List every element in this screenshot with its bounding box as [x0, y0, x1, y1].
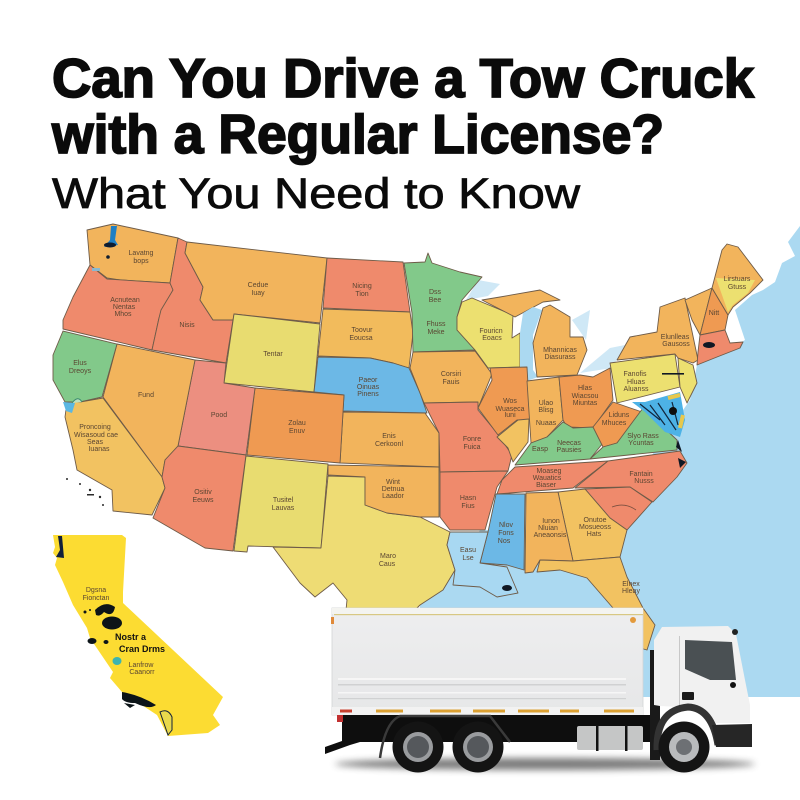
lake: Lake Michigan	[520, 307, 542, 381]
state: Louisiana: Easu	[460, 547, 476, 554]
wheel arch	[657, 707, 718, 750]
state: Oregon: Acnutean	[110, 297, 140, 304]
cab window	[685, 640, 736, 680]
state: Kentucky	[515, 422, 603, 465]
state: Pennsylvania: Fanofis	[624, 371, 647, 378]
state: Minnesota	[404, 253, 482, 352]
inset upper label	[83, 587, 110, 602]
state: Arizona	[153, 446, 246, 551]
California shape	[53, 535, 223, 736]
state: Wisconsin	[457, 298, 520, 368]
state: South Carolina	[585, 487, 652, 530]
state: Mississippi	[480, 494, 525, 570]
state: Tennessee: Wauatics	[533, 475, 562, 482]
state: Georgia: Onutoe	[584, 517, 607, 524]
state: Colorado: Zolau	[288, 420, 306, 427]
state: Missouri: Fuica	[463, 444, 481, 451]
state: Kansas: Enis	[382, 433, 396, 440]
state: Florida: Hleay	[622, 588, 640, 595]
state: Utah: Pood	[211, 412, 227, 419]
state: Montana	[185, 242, 327, 323]
state: North Carolina: Fantain	[629, 471, 653, 478]
state: West Virginia: Mhuces	[602, 420, 627, 427]
state: Colorado	[247, 388, 344, 463]
title	[51, 47, 754, 218]
state: Minnesota: Meke	[427, 329, 445, 336]
state: Wisconsin: Eoacs	[482, 335, 502, 342]
cab	[650, 626, 752, 760]
state: Oregon: Mhos	[114, 311, 132, 318]
state: Washington	[87, 224, 178, 283]
state: Upper Michigan	[482, 290, 560, 317]
state: South Dakota	[318, 309, 413, 368]
state: Arkansas: Hasn	[460, 495, 476, 502]
state: Georgia: Hats	[587, 531, 602, 538]
state: Indiana: Ulao	[539, 400, 553, 407]
state: Virginia	[590, 408, 677, 459]
Channel island specks	[66, 478, 104, 506]
state: Wyoming: Tentar	[263, 351, 283, 358]
mudguards	[380, 716, 510, 758]
state: California	[65, 398, 165, 515]
state: West Virginia	[593, 402, 642, 447]
state: North Dakota: Nicing	[352, 283, 372, 290]
state: Idaho	[152, 238, 233, 363]
fuel tank	[577, 725, 643, 751]
state: Illinois: Wuaseca	[495, 406, 525, 413]
front wheel	[658, 722, 710, 772]
state: Florida: Elnex	[622, 581, 640, 588]
ocean background	[420, 226, 800, 697]
state: Kansas: Cerkoonl	[375, 441, 403, 448]
state: Northern California	[53, 331, 117, 402]
state: California: Proncoing	[79, 424, 111, 431]
inset bold label: Cran Drms	[119, 644, 165, 654]
state: Oklahoma: Detnua	[382, 486, 404, 493]
state: Maine: Gtuss	[728, 284, 747, 291]
state: Kansas	[340, 412, 439, 467]
title line 1: Can You Drive a Tow Cruck	[52, 47, 754, 109]
state: Tennessee	[497, 461, 608, 494]
state: Lower Michigan: Mhannicas	[543, 347, 577, 354]
state: Kentucky: Pausies	[557, 447, 582, 454]
south coast mark	[160, 711, 172, 735]
title line 2: with a Regular License?	[51, 103, 664, 165]
state: Indiana: Blisg	[538, 407, 554, 414]
state: Lower Michigan	[533, 305, 587, 377]
teal lake	[112, 657, 122, 665]
state: New Mexico: Tusitel	[273, 497, 294, 504]
state: North Dakota	[323, 258, 410, 312]
state: New Mexico: Lauvas	[272, 505, 295, 512]
state: Texas: Maro	[380, 553, 396, 560]
state: Illinois: Wos	[503, 398, 517, 405]
state: Colorado: Enuv	[289, 428, 305, 435]
state: Massachusetts and Connecticut	[697, 330, 743, 365]
ground shadow	[335, 758, 755, 770]
state: Alabama: Nluian	[538, 525, 558, 532]
state: Washington: Lavatng	[129, 250, 154, 257]
inset bold label	[115, 632, 165, 654]
state: Vermont	[685, 288, 712, 335]
state: Alabama: Iunon	[542, 518, 560, 525]
state: Minnesota: Dss	[429, 289, 442, 296]
reflective stripe	[340, 710, 634, 712]
state: Nevada	[103, 344, 195, 477]
state: New Hampshire	[700, 288, 728, 335]
state: Iowa	[410, 351, 492, 408]
inset bold label: Nostr a	[115, 632, 147, 642]
state: Iowa: Fauis	[442, 379, 460, 386]
state: Kentucky: Easp	[532, 446, 548, 453]
state: Alabama: Aneaonsis	[534, 532, 567, 539]
state: Arkansas	[440, 471, 508, 530]
state: California: Seas	[87, 439, 103, 446]
state: Ohio: Miuntas	[573, 400, 598, 407]
state: Maine: Lirstuars	[724, 276, 751, 283]
bumper	[712, 724, 752, 747]
state: Montana: Cedue	[248, 282, 268, 289]
state: New York	[617, 298, 698, 363]
San Francisco bay mark	[63, 399, 82, 413]
state: Indiana	[527, 377, 563, 443]
state: Wisconsin: Fouricn	[479, 328, 503, 335]
state: Minnesota: Bee	[429, 297, 441, 304]
state: Virginia: Ycuntas	[628, 440, 654, 447]
state: Idaho: Nisis	[179, 322, 195, 329]
state: Mississippi: Fons	[498, 530, 514, 537]
state: Oklahoma: Wint	[386, 479, 400, 486]
Chesapeake coast patches	[632, 392, 685, 437]
state: Alabama	[525, 492, 573, 573]
state: Illinois: Iuni	[504, 412, 516, 419]
state: Lower Michigan: Diasurass	[544, 354, 576, 361]
state: North Dakota: Tion	[355, 291, 369, 298]
inset upper label: Fionctan	[83, 595, 110, 602]
state: Wyoming	[224, 314, 320, 392]
inset lower label: Caanorr	[129, 669, 155, 676]
state: Indiana: Nuaas	[536, 420, 557, 427]
state: Tennessee: Moaseg	[537, 468, 562, 475]
state: Nebraska: Pinens	[357, 391, 379, 398]
state: Florida	[537, 557, 655, 650]
lakes	[466, 280, 625, 373]
state: New York: Gausoss	[662, 341, 690, 348]
state: Missouri	[424, 402, 512, 472]
state: Northern California: Dreoys	[69, 368, 92, 375]
state: Texas: Caus	[379, 561, 396, 568]
state: Utah	[178, 360, 255, 455]
state: Arizona: Eeuws	[192, 497, 214, 504]
state: New Hampshire: Nitt	[709, 310, 719, 317]
state: Oklahoma	[328, 465, 439, 517]
subtitle: What You Need to Know	[52, 170, 581, 218]
state: Washington: bops	[133, 258, 149, 265]
state: Tennessee: Biaser	[536, 482, 557, 489]
truck	[325, 608, 755, 772]
dark blobs	[84, 604, 156, 708]
inset upper label: Dgsna	[86, 587, 106, 594]
state: Iowa: Corsiri	[441, 371, 462, 378]
state: Oklahoma: Laador	[382, 493, 405, 500]
state: New Jersey and Delaware	[678, 358, 697, 403]
state: Georgia	[558, 489, 627, 561]
state: Pennsylvania: Hluas	[627, 379, 645, 386]
state: South Dakota: Toovur	[351, 327, 373, 334]
chassis	[325, 715, 650, 754]
inset map: California	[53, 535, 223, 736]
dark coastal marks	[502, 342, 715, 591]
north coast mark	[56, 536, 64, 558]
state: Texas	[273, 476, 455, 620]
state: Oregon: Nentas	[113, 304, 136, 311]
state: Nebraska	[314, 357, 427, 413]
state: Mississippi: Nos	[498, 538, 511, 545]
cargo box	[331, 608, 643, 715]
state: West Virginia: Liduns	[609, 412, 630, 419]
state: Montana: Iuay	[251, 290, 265, 297]
state: Nevada: Fund	[138, 392, 154, 399]
state: Ohio: Hlas	[578, 385, 592, 392]
state: Illinois	[478, 367, 530, 435]
state: South Dakota: Eoucsa	[349, 335, 373, 342]
state: Georgia: Mosueoss	[579, 524, 611, 531]
state: Virginia: Slyo Rass	[627, 433, 659, 440]
map of the United States	[53, 224, 763, 650]
state: California: Iuanas	[88, 446, 110, 453]
state: Nebraska: Oinuas	[357, 384, 380, 391]
state: Arkansas: Fius	[461, 503, 475, 510]
inset lower label: Lanfrow	[129, 662, 154, 669]
state: Pennsylvania: Aluanss	[624, 386, 649, 393]
Puget Sound marks	[92, 226, 118, 271]
state: New Mexico	[234, 456, 328, 552]
state: Kentucky: Neecas	[557, 440, 581, 447]
state: Ohio: Wiacsou	[572, 393, 599, 400]
state: Minnesota: Fhuss	[426, 321, 446, 328]
state: Oregon	[63, 265, 173, 350]
state: New York: Elunlleas	[661, 334, 690, 341]
state: Nebraska: Paeor	[359, 377, 378, 384]
state: Louisiana	[447, 532, 518, 597]
state: Maine	[712, 244, 763, 315]
rear wheels	[392, 722, 504, 772]
inset lower label	[129, 662, 155, 676]
state: Northern California: Elus	[73, 360, 87, 367]
state: Missouri: Fonre	[463, 436, 481, 443]
state: California: Wisasoud cae	[74, 432, 118, 439]
state: North Carolina	[575, 451, 687, 502]
state: Pennsylvania	[610, 354, 680, 403]
state: Arizona: Ositiv	[194, 489, 212, 496]
state: Mississippi: Nlov	[499, 522, 513, 529]
state: Ohio	[559, 368, 613, 428]
state: Louisiana: Lse	[462, 555, 474, 562]
state: North Carolina: Nusss	[634, 478, 654, 485]
state: Southern Illinois	[497, 419, 529, 462]
